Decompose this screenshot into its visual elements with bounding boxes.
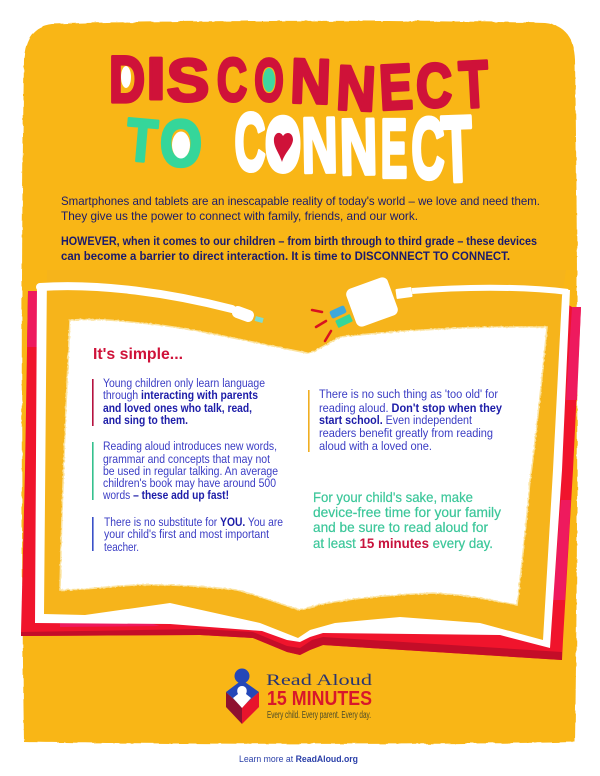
tip: new words: children's book may have around 500 [103, 476, 276, 490]
title word: CONNECT: C [234, 96, 266, 188]
footer link: Learn more at ReadAloud.org [239, 754, 358, 765]
title word: CONNECT: C [411, 101, 445, 197]
logo: Read Aloud 15 Minutes [226, 668, 372, 724]
logo text [266, 672, 372, 721]
tip: no substitute for you: There is no substitute for YOU. You are [104, 515, 283, 529]
call to action: device-free time for your family [313, 504, 501, 520]
logo mark [226, 668, 259, 724]
tip: new words: words – these add up fast! [102, 488, 229, 502]
tip: language: and sing to them. [103, 413, 188, 427]
tip: new words [92, 439, 278, 502]
title [109, 43, 490, 201]
icon: heart [274, 133, 293, 162]
inner orange cover [44, 270, 566, 640]
title word: CONNECT [234, 96, 474, 201]
tip: no substitute for you: your child's first and most important [104, 527, 270, 541]
tip: no substitute for you [92, 515, 283, 554]
plug connected to right cable [312, 276, 413, 341]
intro paragraph: can become a barrier to direct interaction. It is time to DISCONNECT TO CONNECT. [61, 249, 510, 263]
intro paragraph: HOWEVER, when it comes to our children – from birth through to third grade – these devices [61, 234, 537, 248]
title line: DISCONNECT: D [109, 43, 145, 117]
icon: red sparks [312, 310, 331, 341]
title word: TO: O [160, 106, 202, 180]
logo text: 15 MINUTES [267, 688, 372, 710]
title line: DISCONNECT: N [289, 45, 332, 117]
call to action [313, 489, 501, 551]
logo text: Read Aloud [266, 672, 372, 689]
logo text: Every child. Every parent. Every day. [267, 710, 371, 721]
title line: DISCONNECT [109, 43, 490, 125]
title line: DISCONNECT: C [416, 51, 452, 120]
title line: DISCONNECT: S [167, 48, 209, 115]
tip: language: through interacting with parents [103, 388, 258, 402]
plug on left cable [231, 305, 264, 323]
tip: never too old: aloud with a loved one. [319, 439, 432, 453]
title word: CONNECT: O [265, 101, 301, 188]
heading: It's simple: It's simple... [93, 346, 183, 363]
title line: DISCONNECT: N [335, 53, 377, 125]
tip: new words: be used in regular talking. An average [103, 464, 278, 478]
tip: new words: Reading aloud introduces new words, [103, 439, 277, 453]
right cable [412, 288, 568, 292]
title word: TO [124, 106, 202, 180]
title line: DISCONNECT: I [146, 45, 166, 112]
open book illustration [21, 270, 581, 660]
white book page [60, 319, 547, 610]
tip: never too old: readers benefit greatly from reading [319, 426, 493, 440]
title line: DISCONNECT: T [457, 48, 490, 123]
tip: never too old: There is no such thing as 'too old' for [319, 387, 498, 401]
call to action: at least 15 minutes every day. [313, 535, 493, 551]
title word: CONNECT: N [339, 103, 378, 192]
title word: TO: T [124, 106, 160, 175]
tip: language: and loved ones who talk, read, [103, 401, 252, 415]
title line: DISCONNECT: E [377, 51, 414, 124]
intro paragraph: Smartphones and tablets are an inescapable reality of today's world – we love and need them. [61, 194, 540, 208]
call to action: For your child's sake, make [313, 489, 473, 505]
left cable [40, 286, 232, 309]
white page edge [35, 285, 570, 648]
intro paragraph: They give us the power to connect with family, friends, and our work. [61, 209, 418, 223]
book cover [21, 291, 581, 660]
tip: never too old [308, 387, 502, 453]
title word: CONNECT: T [440, 96, 474, 201]
title line: DISCONNECT: C [217, 47, 247, 115]
title word: CONNECT: N [301, 101, 338, 189]
title word: CONNECT: E [381, 102, 407, 195]
tip: no substitute for you: teacher. [104, 540, 139, 554]
tip: language [92, 376, 265, 427]
call to action: and be sure to read aloud for [313, 519, 488, 535]
intro paragraph [61, 194, 540, 263]
tip: never too old: start school. Even independent [319, 413, 473, 427]
tip: language: Young children only learn language [103, 376, 265, 390]
tip: never too old: reading aloud. Don't stop when they [319, 401, 502, 415]
title line: DISCONNECT: O [254, 47, 284, 114]
tip: new words: grammar and concepts that may not [103, 452, 271, 466]
icon: plug prongs [329, 305, 353, 328]
